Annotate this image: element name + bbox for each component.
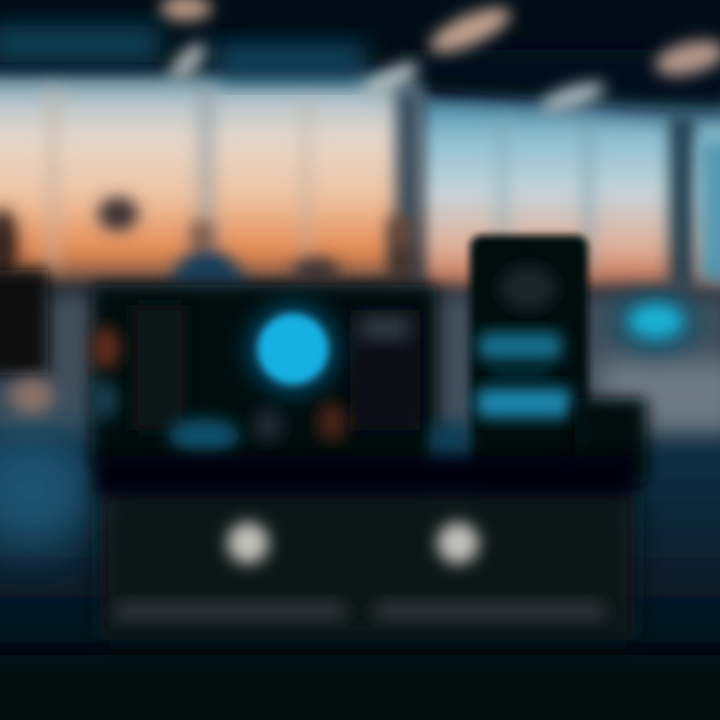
phone blue bar 2 bbox=[476, 388, 572, 418]
blue lower widget bbox=[168, 418, 240, 454]
dark ceiling right bbox=[400, 50, 720, 112]
ceiling lights bbox=[160, 0, 720, 118]
blurred silhouettes of people bbox=[0, 197, 416, 295]
phone top graphic bbox=[500, 266, 556, 310]
ceiling bbox=[0, 0, 720, 112]
laptop hinge shadow bbox=[95, 455, 635, 497]
blue accent left bbox=[89, 380, 119, 420]
left small warm object bbox=[10, 378, 54, 414]
lower room tone bbox=[0, 288, 720, 448]
panel: laptop keyboard bbox=[95, 455, 635, 640]
window sky: cooler right side bbox=[420, 95, 720, 290]
phone small bar bbox=[490, 368, 550, 378]
left text blur bbox=[115, 602, 345, 620]
grey lower widget bbox=[253, 407, 283, 443]
window mullions bbox=[46, 85, 694, 295]
floor gradient bbox=[0, 435, 720, 720]
phone blue bar 1 bbox=[478, 332, 562, 360]
blue stand between monitor and phone bbox=[430, 425, 468, 500]
red accent left bbox=[91, 326, 121, 370]
window sky: warm left side bbox=[0, 70, 425, 285]
bottom shadow bbox=[0, 655, 720, 720]
panel: tablet behind phone bbox=[575, 398, 647, 483]
teal ceiling band middle bbox=[215, 44, 365, 78]
orange lower widget bbox=[317, 402, 347, 442]
right pale room area bbox=[600, 360, 720, 430]
dashboard column: left bbox=[132, 305, 187, 430]
far left dark figure bbox=[0, 270, 48, 375]
far right teal window bbox=[700, 140, 720, 285]
cyan glowing circle bbox=[251, 307, 335, 391]
panel: smartphone bbox=[470, 235, 588, 480]
icon: right white button bbox=[437, 522, 479, 564]
cyan circle core bbox=[258, 314, 328, 384]
dashboard header right bbox=[360, 316, 410, 340]
right text blur bbox=[375, 602, 605, 620]
left blue glow bbox=[0, 430, 95, 550]
icon: right cyan glow bbox=[616, 296, 696, 348]
dashboard column: right bbox=[350, 310, 420, 430]
icon: left white button bbox=[227, 522, 269, 564]
panel: main dashboard monitor bbox=[89, 285, 437, 470]
teal ceiling band left bbox=[0, 26, 160, 62]
